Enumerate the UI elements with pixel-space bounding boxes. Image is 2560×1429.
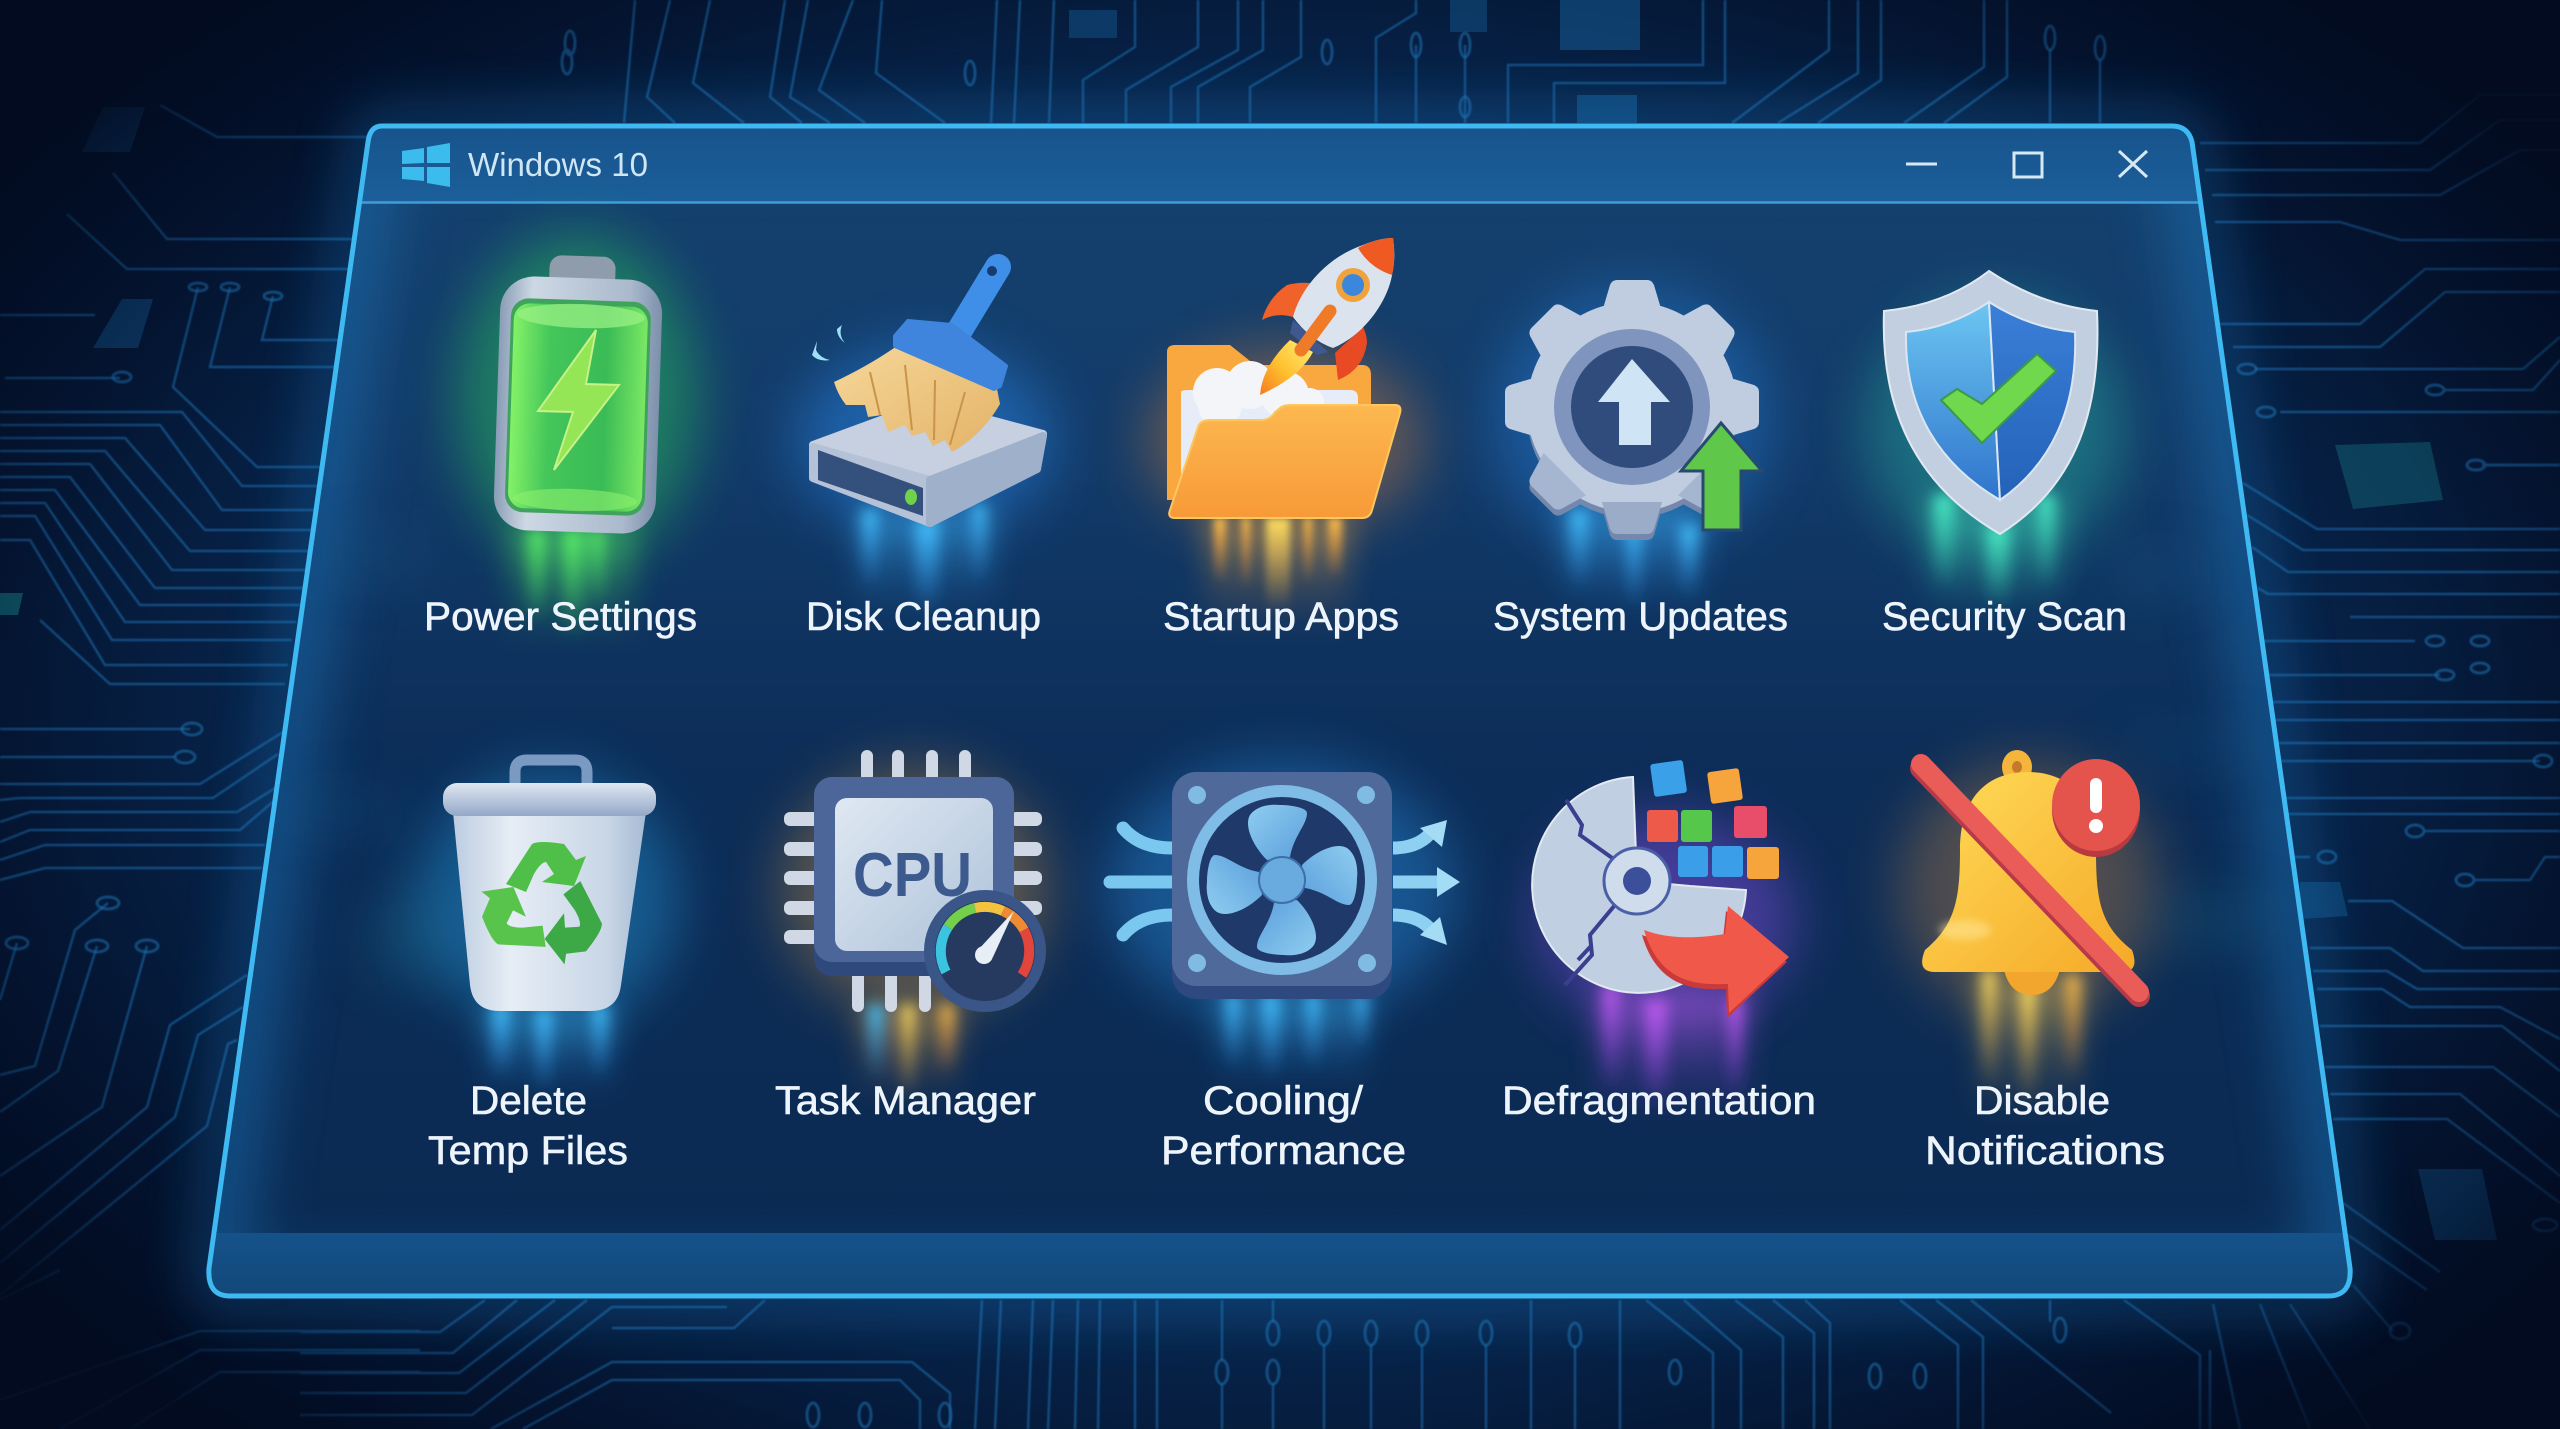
tile: Task Manager (780, 750, 1050, 1100)
tile: Cooling/Performance (1107, 760, 1460, 1090)
label: Disable Notifications: Notifications (1925, 1129, 2165, 1173)
bottom status bar (214, 1233, 2344, 1277)
tile: Startup Apps (1145, 238, 1425, 630)
tile: System Updates (1492, 280, 1772, 615)
icon: broom (812, 266, 1006, 452)
icon: trash can (443, 760, 656, 1011)
icon: rocket (1260, 238, 1394, 395)
tile: Delete Temp Files (418, 760, 678, 1100)
icon: CPU chip (784, 750, 1042, 1012)
tile: Defragmentation (1532, 760, 1795, 1120)
tile: Security Scan (1865, 271, 2125, 620)
label: Delete Temp Files: Temp Files (428, 1129, 628, 1173)
title bar (362, 146, 2198, 202)
window title text: Windows 10 (468, 146, 648, 183)
application window panel (190, 126, 2370, 1303)
label: Task Manager: Task Manager (775, 1079, 1036, 1123)
icon: green update arrow (1681, 423, 1762, 530)
label: Cooling/Performance: Cooling/ (1203, 1079, 1364, 1123)
label: Disable Notifications: Disable (1974, 1079, 2110, 1123)
icon: hard disk (813, 403, 1043, 523)
icon: shield (1884, 271, 2098, 534)
label: Startup Apps: Startup Apps (1163, 595, 1399, 639)
icon: colored data blocks (1647, 760, 1779, 879)
icon: recycle arrows (469, 842, 617, 971)
tile: Power Settings (458, 235, 698, 645)
label: Security Scan: Security Scan (1882, 595, 2127, 639)
label: Delete Temp Files: Delete (470, 1079, 587, 1123)
icon: red arrow (1642, 906, 1789, 1018)
icon: windows logo (402, 143, 450, 187)
label: System Updates: System Updates (1493, 595, 1788, 639)
icon: gear (1505, 280, 1759, 540)
icon: red slash (1921, 764, 2139, 996)
label: Cooling/Performance: Performance (1161, 1129, 1406, 1173)
icon: cooling fan (1172, 772, 1392, 999)
window controls: minimize, maximize, close (1906, 151, 2147, 177)
label: Disk Cleanup: Disk Cleanup (806, 595, 1041, 639)
icon: alert badge (2052, 759, 2140, 857)
tile: Disk Cleanup (795, 266, 1055, 620)
icon: cracked disc (1532, 777, 1746, 993)
label: Defragmentation: Defragmentation (1502, 1079, 1816, 1123)
icon: speed gauge (924, 890, 1046, 1012)
label: Power Settings: Power Settings (424, 595, 697, 639)
icon: battery (493, 253, 664, 535)
icon: air flow arrows (1110, 820, 1460, 945)
tile: Disable Notifications (1898, 750, 2158, 1120)
icon: folder (1167, 345, 1400, 518)
icon: CPU chip: CPU (853, 841, 972, 910)
icon: bell (1922, 750, 2134, 995)
